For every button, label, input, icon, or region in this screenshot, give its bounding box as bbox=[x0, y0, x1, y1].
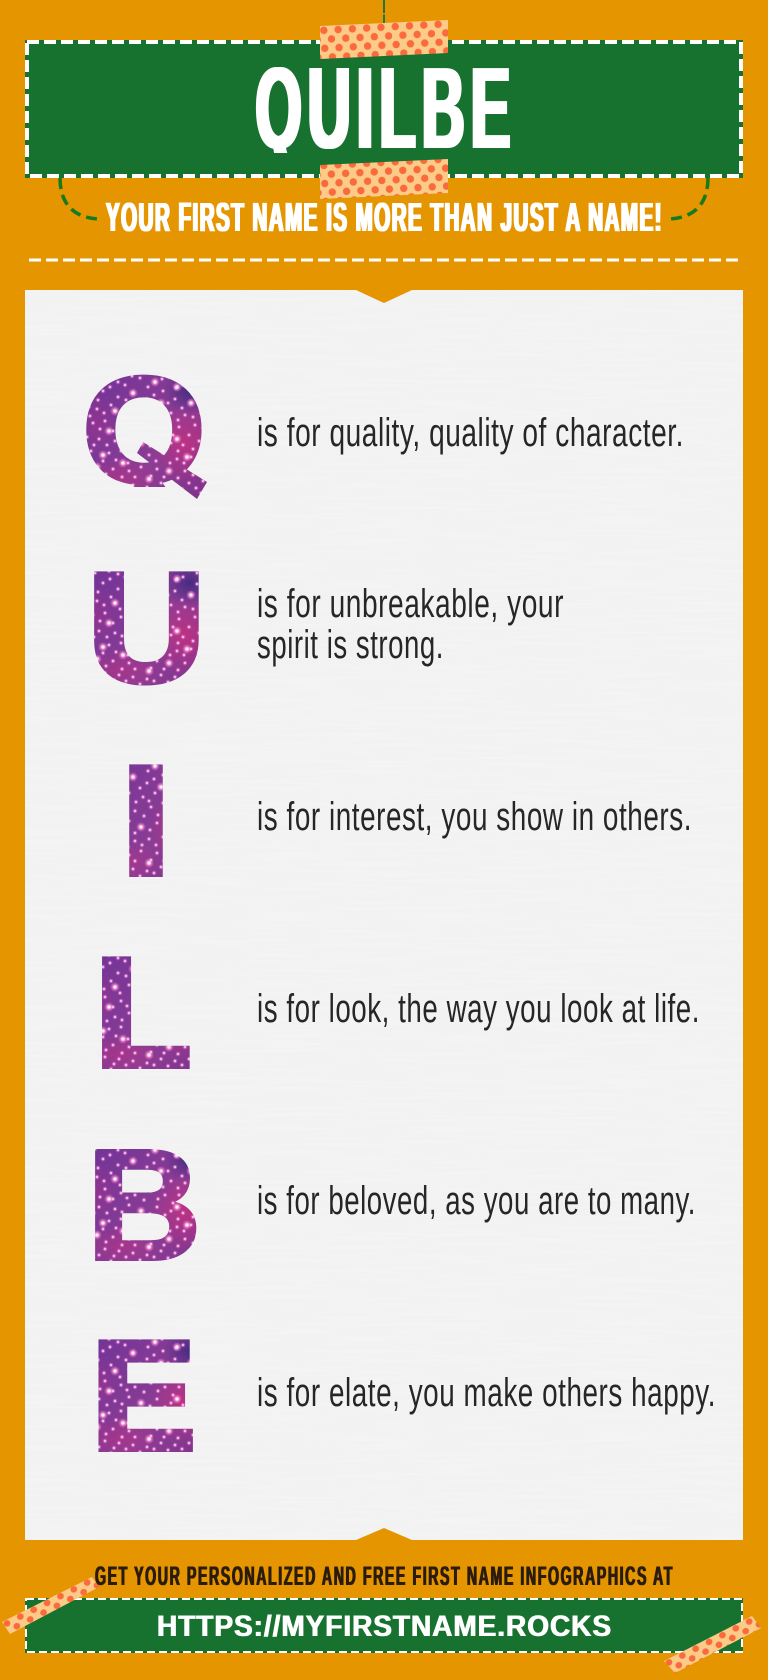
title banner bbox=[25, 40, 743, 178]
connector: left dashed curve bbox=[60, 178, 102, 219]
letter U: U bbox=[88, 541, 206, 714]
meaning U bbox=[257, 582, 564, 667]
connector: right dashed curve bbox=[666, 178, 708, 219]
tape: banner top bbox=[320, 20, 448, 59]
tape: banner bottom bbox=[320, 159, 448, 199]
letter B: B bbox=[86, 1118, 202, 1293]
footer url: HTTPS://MYFIRSTNAME.ROCKS bbox=[157, 1610, 612, 1643]
notch: panel bottom bbox=[356, 1528, 412, 1540]
letter Q bbox=[86, 374, 207, 499]
title: QUILBE bbox=[256, 43, 516, 173]
tape: footer right bbox=[664, 1616, 761, 1673]
letter Q: Q bbox=[83, 348, 205, 513]
panel: letters and meanings bbox=[25, 290, 743, 1540]
footer banner bbox=[25, 1598, 743, 1653]
letter L: L bbox=[94, 926, 192, 1099]
meaning U: is for unbreakable, your bbox=[257, 582, 564, 626]
tape: footer left bbox=[2, 1577, 99, 1634]
letter I: I bbox=[120, 734, 172, 907]
meaning U: spirit is strong. bbox=[257, 623, 444, 667]
letter E: E bbox=[91, 1309, 196, 1482]
hanging line above title banner bbox=[383, 0, 385, 23]
notch: panel top bbox=[356, 290, 412, 303]
